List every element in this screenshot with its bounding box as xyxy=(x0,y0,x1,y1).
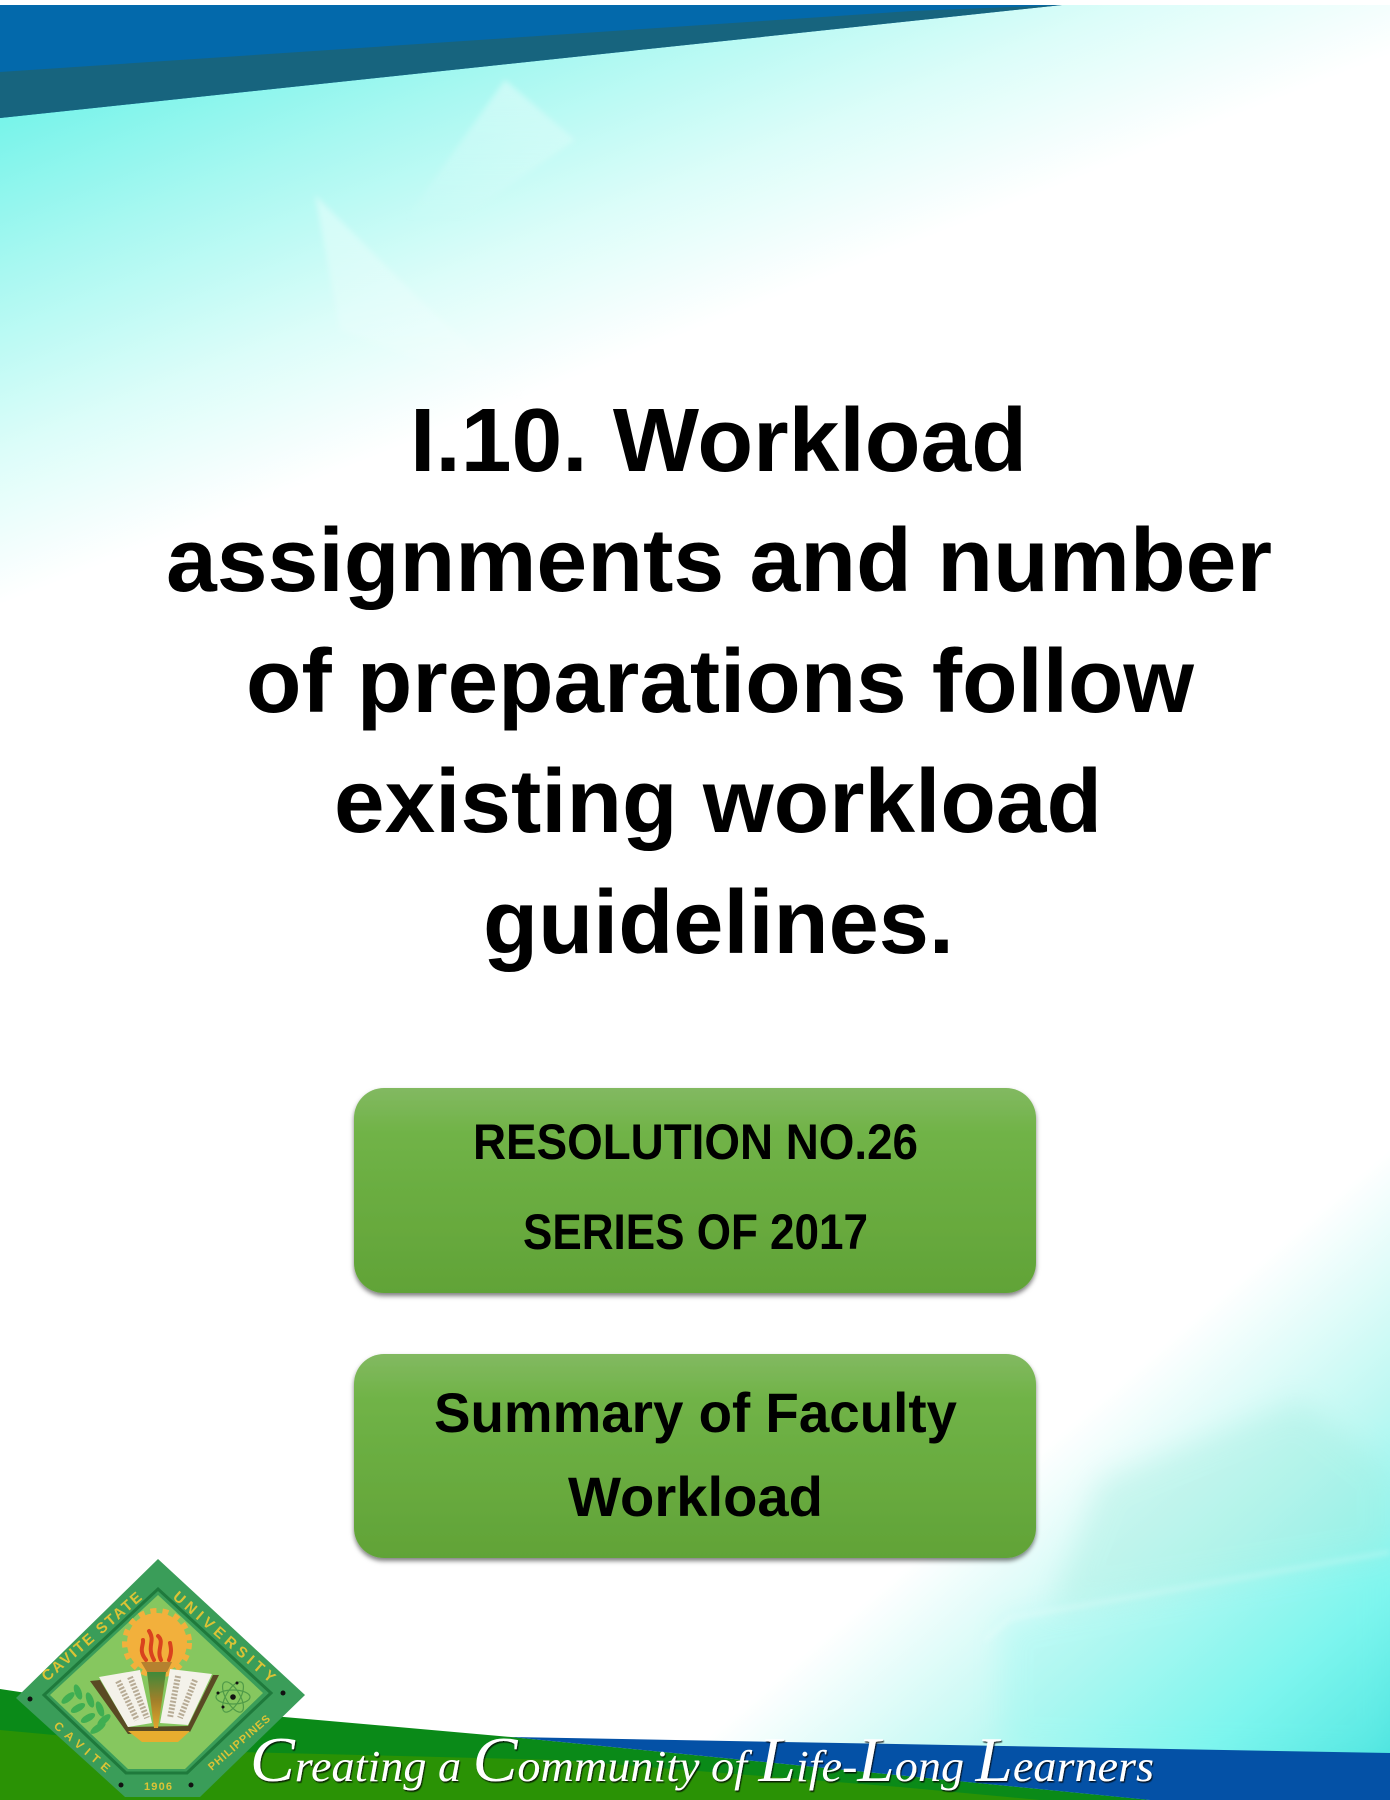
button: resolution no. 26: SERIES OF 2017 xyxy=(523,1204,868,1260)
button: summary of faculty workload: Summary of Faculty xyxy=(434,1381,957,1444)
logo: sun xyxy=(125,1611,189,1675)
button: summary of faculty workload: Workload xyxy=(568,1465,823,1528)
logo: Cavite State University seal xyxy=(16,1559,305,1797)
button: resolution no. 26: RESOLUTION NO.26 xyxy=(473,1114,918,1170)
logo: rivets xyxy=(28,1690,286,1788)
button: resolution no. 26 xyxy=(354,1088,1036,1293)
logo: seal ring lettering: UNIVERSITY xyxy=(169,1588,279,1686)
footer band: green and blue swoosh xyxy=(0,1689,1390,1800)
title: of preparations follow xyxy=(246,632,1195,732)
logo: torch xyxy=(141,1662,172,1728)
logo: leaves xyxy=(60,1683,112,1736)
button: summary of faculty workload xyxy=(354,1354,1036,1558)
logo: seal ring lettering: CAVITE STATE xyxy=(38,1589,145,1685)
title: existing workload xyxy=(334,752,1102,852)
logo: open book xyxy=(90,1669,219,1742)
title: I.10. Workload xyxy=(410,391,1027,491)
title: guidelines. xyxy=(483,873,954,973)
title xyxy=(166,391,1272,973)
logo: seal ring lettering: CAVITE xyxy=(51,1719,113,1775)
logo: torch flame xyxy=(142,1631,171,1660)
logo: seal ring lettering: PHILIPPINES xyxy=(206,1713,273,1773)
top banner: blue wedge xyxy=(0,0,1390,118)
logo: seal ring lettering: 1906 xyxy=(144,1781,172,1793)
logo: seal ring lettering xyxy=(38,1588,279,1793)
slogan: Creating a Community of Life-Long Learners xyxy=(250,1724,1154,1795)
title: assignments and number xyxy=(166,511,1272,611)
logo: atom xyxy=(216,1679,250,1715)
